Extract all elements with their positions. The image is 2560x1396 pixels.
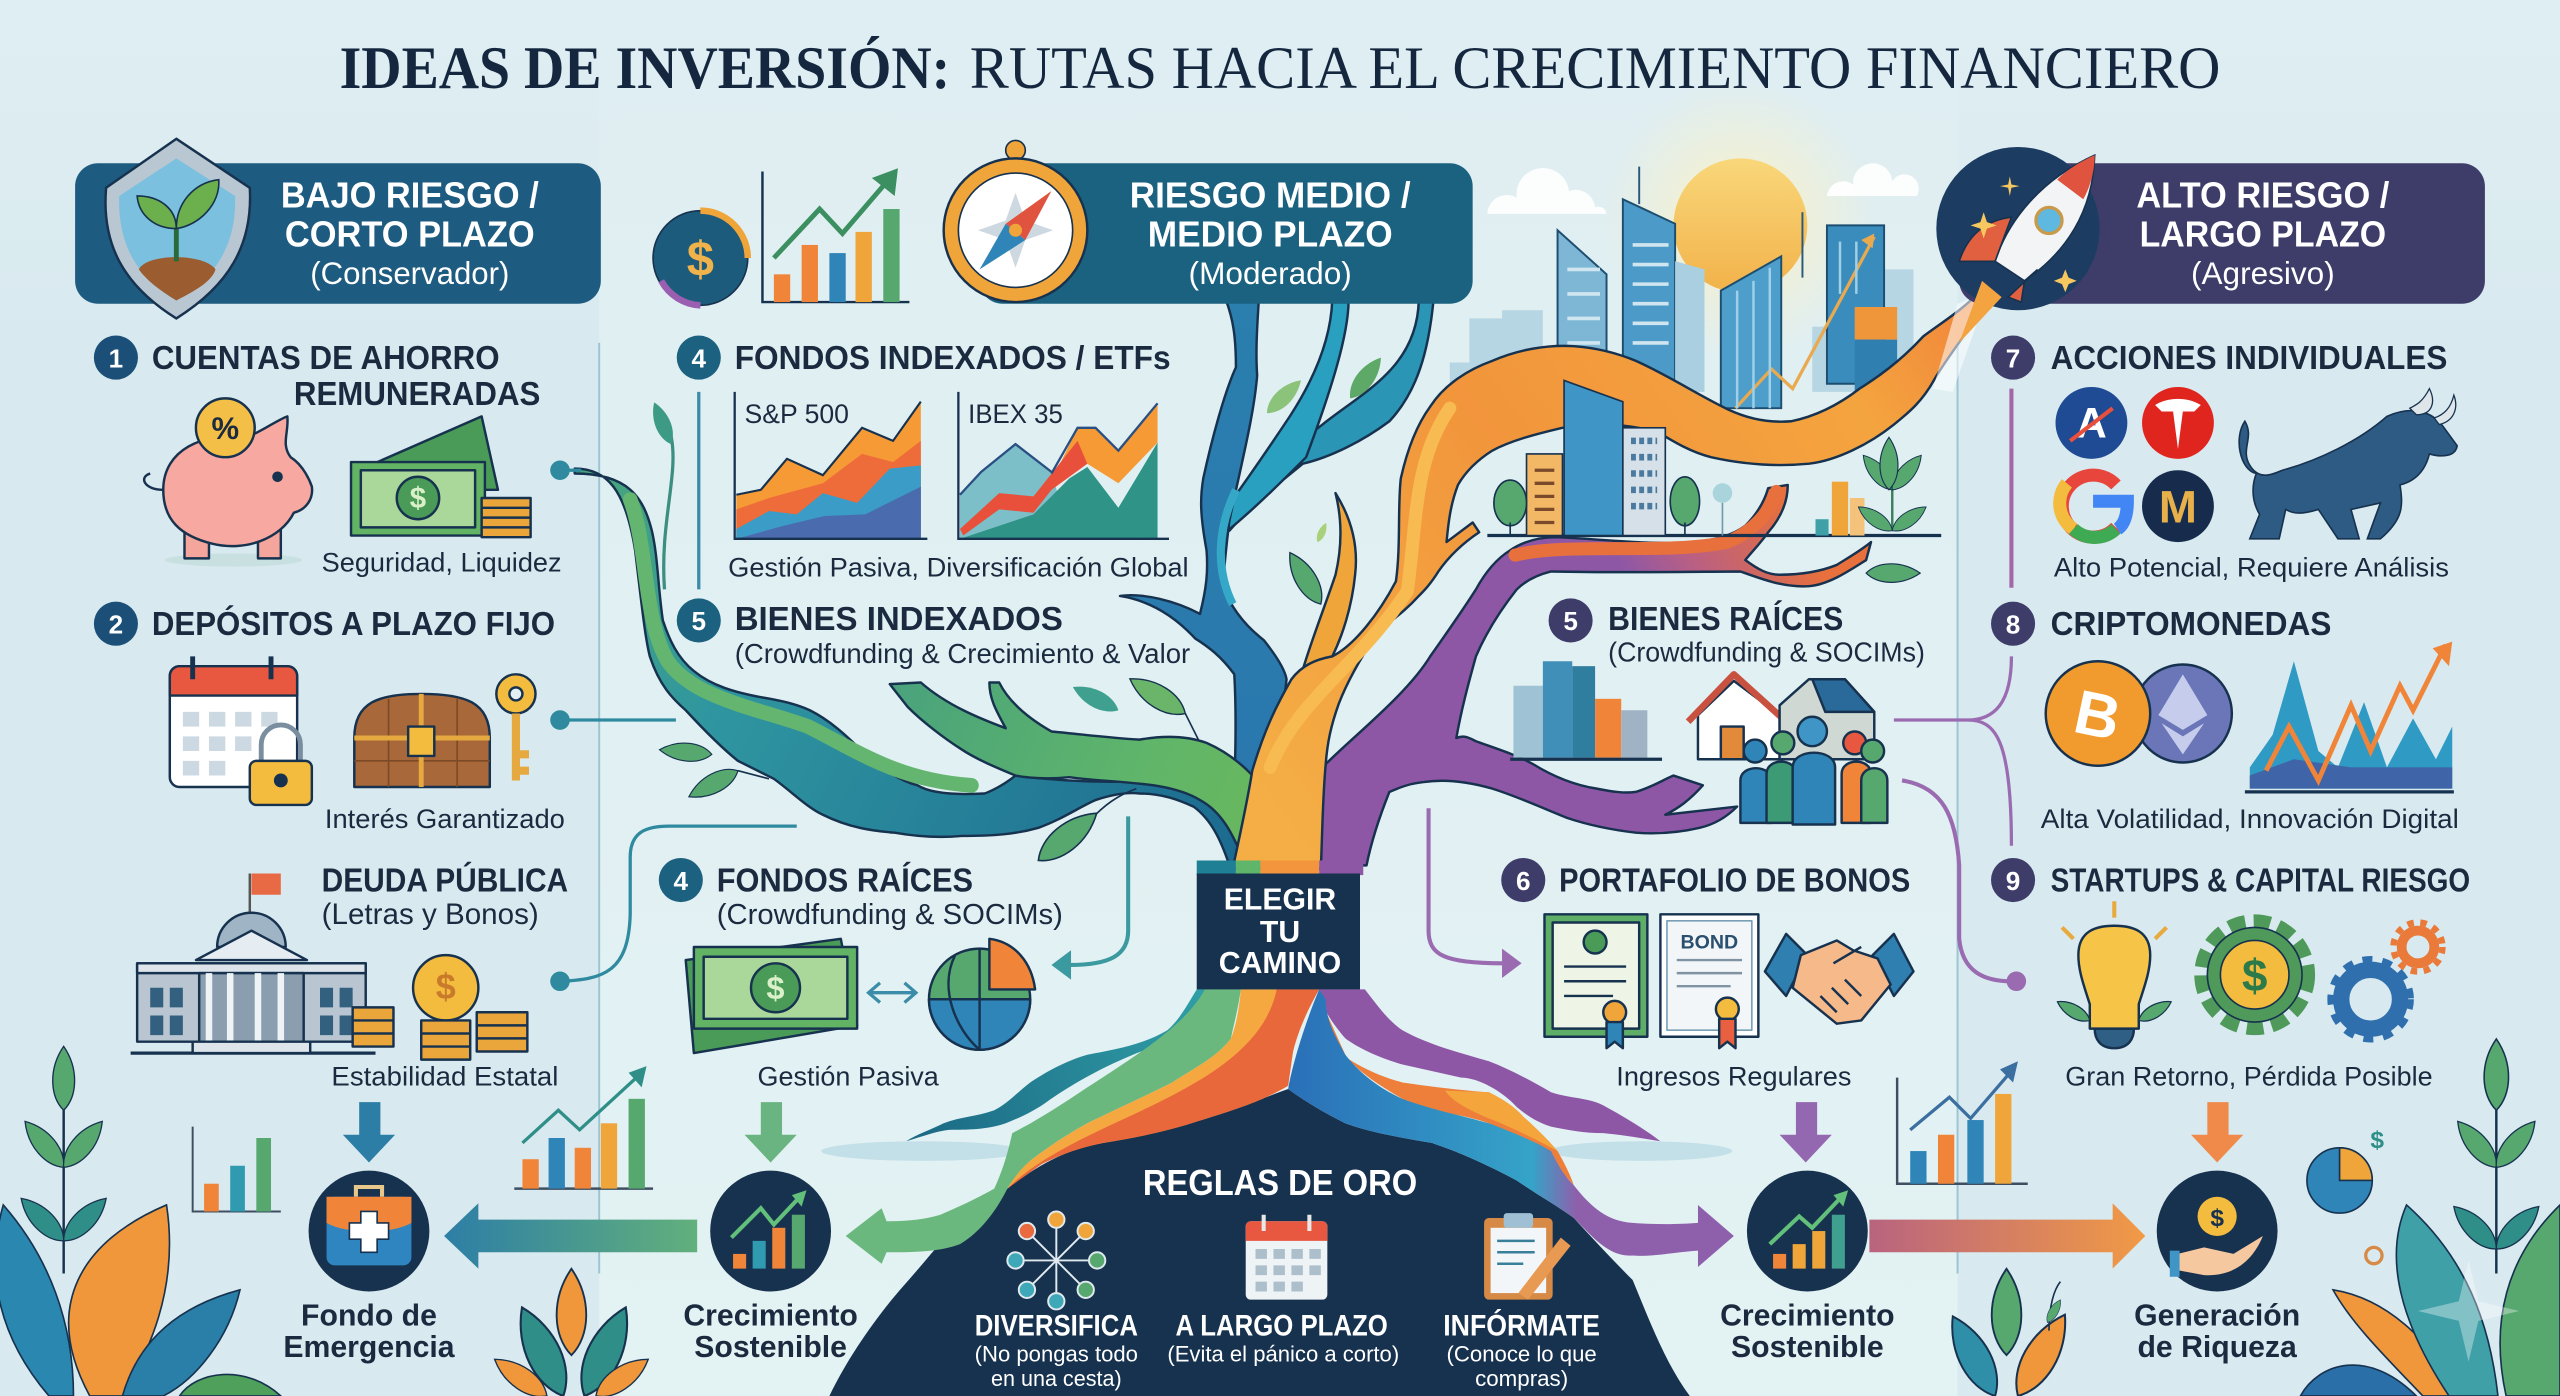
illustration: flame glow xyxy=(1933,291,1989,392)
icon: gears xyxy=(2331,922,2442,1038)
icon: coins xyxy=(353,955,527,1060)
section: startups: Gran Retorno, Pérdida Posible xyxy=(2065,1062,2433,1092)
icon: stock logos xyxy=(2056,387,2214,542)
section: depositos: Interés Garantizado xyxy=(325,804,565,834)
panel: elegir tu camino: ELEGIR xyxy=(1224,883,1336,916)
icon: hand holding coin: $ xyxy=(2210,1205,2224,1232)
node: crecimiento left: Crecimiento xyxy=(683,1300,858,1333)
branch: blue highlight xyxy=(1221,490,1236,604)
header: riesgo medio: RIESGO MEDIO / xyxy=(1130,174,1411,215)
root: blue right with purple arrow xyxy=(1288,989,1734,1267)
chart: small bars with trend xyxy=(514,1066,653,1189)
panel: reglas de oro: A LARGO PLAZO xyxy=(1176,1310,1388,1343)
icon: buildings xyxy=(1510,661,1662,759)
illustration: bottom-right plants xyxy=(1939,1039,2560,1396)
branch: orange to rocket xyxy=(1233,281,2000,869)
header: bajo riesgo xyxy=(75,139,601,318)
root: orange right xyxy=(1322,1004,1574,1185)
icon: globe with pie slice xyxy=(929,939,1035,1050)
section: acciones individuales xyxy=(1991,336,2457,582)
icon: cash stack xyxy=(686,939,857,1053)
node: generacion de riqueza: Generación xyxy=(2134,1300,2300,1333)
icon: bitcoin coin: B xyxy=(2068,677,2127,754)
section: bienes indexados: BIENES INDEXADOS xyxy=(735,601,1063,638)
section: bienes raices: (Crowdfunding & SOCIMs) xyxy=(1608,636,1925,667)
icon: shield with sprout xyxy=(105,139,250,318)
arrow: to wealth generation xyxy=(1869,1203,2145,1269)
section: portafolio de bonos xyxy=(1501,858,1913,1092)
icon: piggy bank xyxy=(144,398,312,567)
section: bienes indexados: 5 xyxy=(692,606,706,636)
icon: hanging leaf xyxy=(647,399,678,447)
header: bajo riesgo: (Conservador) xyxy=(310,256,509,291)
illustration: leaves along branches xyxy=(659,352,1920,870)
node: crecimiento right: Crecimiento xyxy=(1720,1300,1895,1333)
section: acciones individuales: Alto Potencial, Requiere Análisis xyxy=(2054,552,2449,582)
header: alto riesgo xyxy=(1936,147,2485,343)
icon: bull xyxy=(2239,389,2457,539)
section: acciones individuales: 7 xyxy=(2006,343,2020,373)
root: amber right xyxy=(1445,1091,1558,1151)
section: fondos raices: 4 xyxy=(674,866,689,896)
icon: government building xyxy=(131,874,376,1053)
icon: bond document: BOND xyxy=(1681,932,1738,954)
chart: small bars left xyxy=(193,1127,281,1211)
branch: green highlight on main xyxy=(630,500,971,785)
panel: reglas de oro: (Evita el pánico a corto) xyxy=(1167,1342,1399,1367)
icon: handshake xyxy=(1765,934,1913,1024)
icon: double arrow xyxy=(869,983,916,1002)
node: crecimiento left xyxy=(683,1171,858,1364)
section: criptomonedas: Alta Volatilidad, Innovación Digital xyxy=(2041,804,2459,834)
illustration: lower city on branch xyxy=(1487,380,1941,536)
section: portafolio de bonos: 6 xyxy=(1516,866,1531,896)
section: deuda publica xyxy=(131,861,568,1092)
branch: orange side twig xyxy=(1303,493,1356,669)
node: generacion de riqueza xyxy=(2134,1171,2300,1364)
section: bienes indexados: (Crowdfunding & Crecimiento & Valor xyxy=(735,638,1190,669)
section: depositos: 2 xyxy=(109,610,123,640)
branch: purple with forks xyxy=(1314,485,1871,865)
section: fondos indexados etfs xyxy=(677,336,1189,582)
node: fondo de emergencia xyxy=(283,1171,455,1364)
icon: growth chart xyxy=(762,168,909,302)
section: cuentas de ahorro: CUENTAS DE AHORRO xyxy=(152,340,500,377)
panel: reglas de oro: INFÓRMATE xyxy=(1443,1309,1600,1343)
icon: compass xyxy=(944,140,1087,302)
root: green left with arrow xyxy=(846,989,1241,1264)
chart: s&p 500 xyxy=(735,392,927,539)
icon: hand holding coin xyxy=(2170,1197,2263,1277)
icon: network xyxy=(1007,1211,1105,1309)
panel: elegir tu camino: TU xyxy=(1260,916,1300,949)
panel: elegir tu camino xyxy=(1197,860,1363,989)
node: fondo de emergencia: Emergencia xyxy=(283,1331,455,1364)
root: teal left xyxy=(906,989,1241,1141)
header: riesgo medio xyxy=(653,140,1473,305)
icon: dollar gear: $ xyxy=(2242,950,2267,1001)
section: cuentas de ahorro: Seguridad, Liquidez xyxy=(322,547,562,577)
icon: dollar gear xyxy=(2202,922,2307,1027)
title: RUTAS HACIA EL CRECIMIENTO FINANCIERO xyxy=(970,35,2220,102)
icon: rocket xyxy=(1936,147,2100,343)
icon: group of people xyxy=(1740,717,1887,825)
icon: first-aid kit xyxy=(327,1187,411,1265)
header: bajo riesgo: BAJO RIESGO / xyxy=(281,174,539,215)
section: fondos raices xyxy=(659,858,1063,1092)
connectors xyxy=(550,389,2026,991)
icon: bond document xyxy=(1660,914,1758,1048)
illustration: upper city with sun xyxy=(1450,82,1919,408)
panel: reglas de oro xyxy=(975,1162,1600,1391)
node: crecimiento right xyxy=(1720,1171,1895,1364)
arrow: down green xyxy=(744,1102,797,1162)
section: startups: STARTUPS & CAPITAL RIESGO xyxy=(2051,862,2470,899)
illustration: bottom-left plants xyxy=(0,1046,654,1396)
node: crecimiento right: Sostenible xyxy=(1731,1331,1884,1364)
section: bienes indexados xyxy=(677,598,1190,669)
section: startups: 9 xyxy=(2006,866,2020,896)
branch: teal left main xyxy=(575,469,1298,865)
icon: light bulb xyxy=(2054,901,2175,1048)
section: deuda publica: Estabilidad Estatal xyxy=(331,1062,558,1092)
branch: center stem xyxy=(1228,300,1349,531)
root: red-orange left xyxy=(1007,989,1319,1189)
branch: green upper xyxy=(890,682,1298,865)
panel: reglas de oro: DIVERSIFICA xyxy=(975,1310,1138,1343)
icon: calendar with lock xyxy=(170,656,312,805)
section: portafolio de bonos: Ingresos Regulares xyxy=(1616,1062,1851,1092)
section: cuentas de ahorro: 1 xyxy=(109,343,123,373)
chart: ibex 35: IBEX 35 xyxy=(968,399,1063,429)
tree: branches and trunk xyxy=(575,281,2000,869)
panel: reglas de oro: REGLAS DE ORO xyxy=(1143,1162,1417,1203)
header: bajo riesgo: CORTO PLAZO xyxy=(285,214,535,255)
section: deuda publica: (Letras y Bonos) xyxy=(322,898,539,931)
section: cuentas de ahorro: REMUNERADAS xyxy=(294,376,540,413)
header: riesgo medio: MEDIO PLAZO xyxy=(1148,214,1393,255)
section: fondos raices: FONDOS RAÍCES xyxy=(717,861,973,899)
chart: crypto volatility xyxy=(2245,642,2454,792)
icon: stock logos: A xyxy=(2076,400,2107,447)
icon: piggy bank: % xyxy=(212,411,239,446)
branch: right teal stem xyxy=(1228,300,1433,531)
section: deuda publica: DEUDA PÚBLICA xyxy=(322,861,568,899)
arrow: down purple xyxy=(1780,1102,1832,1162)
chart: small bars right xyxy=(1897,1061,2028,1184)
root: purple right xyxy=(1319,989,1660,1141)
node: fondo de emergencia: Fondo de xyxy=(301,1300,437,1333)
section: startups xyxy=(1991,858,2470,1092)
icon: treasure chest and key xyxy=(354,674,536,787)
section: fondos indexados etfs: 4 xyxy=(692,343,707,373)
icon: clipboard xyxy=(1484,1213,1571,1300)
icon: stock logos: M xyxy=(2159,481,2197,532)
panel: reglas de oro: compras) xyxy=(1475,1366,1568,1391)
title xyxy=(340,35,2220,102)
icon: dollar coin xyxy=(653,211,748,305)
icon: coins: $ xyxy=(436,966,456,1007)
panel: reglas de oro: (Conoce lo que xyxy=(1447,1342,1597,1367)
section: criptomonedas: CRIPTOMONEDAS xyxy=(2051,606,2331,643)
icon: calendar xyxy=(1246,1215,1327,1300)
section: depositos: DEPÓSITOS A PLAZO FIJO xyxy=(152,605,555,643)
header: alto riesgo: LARGO PLAZO xyxy=(2140,214,2386,255)
icon: houses xyxy=(1688,674,1874,759)
icon: dollar coin: $ xyxy=(687,233,714,287)
panel: reglas de oro: en una cesta) xyxy=(991,1366,1122,1391)
icon: certificate xyxy=(1544,914,1647,1048)
section: bienes raices: BIENES RAÍCES xyxy=(1608,600,1843,638)
icon: growth chart xyxy=(731,1190,807,1269)
section: fondos indexados etfs: FONDOS INDEXADOS / ETFs xyxy=(735,340,1171,377)
header: riesgo medio: (Moderado) xyxy=(1189,256,1352,291)
node: crecimiento left: Sostenible xyxy=(694,1331,847,1364)
header: alto riesgo: ALTO RIESGO / xyxy=(2136,174,2389,215)
icon: banknotes and coins xyxy=(351,416,531,537)
icon: ethereum coin xyxy=(2134,665,2232,762)
section: criptomonedas: 8 xyxy=(2006,610,2020,640)
icon: growth chart xyxy=(1770,1190,1848,1269)
chart: s&p 500: S&P 500 xyxy=(744,399,849,429)
section: fondos raices: (Crowdfunding & SOCIMs) xyxy=(717,899,1063,931)
icon: small pie with dollar: $ xyxy=(2370,1127,2384,1154)
node: generacion de riqueza: de Riqueza xyxy=(2137,1331,2297,1364)
section: portafolio de bonos: PORTAFOLIO DE BONOS xyxy=(1559,862,1910,899)
icon: banknotes and coins: $ xyxy=(410,482,426,515)
section: depositos xyxy=(94,602,565,834)
section: cuentas de ahorro xyxy=(94,336,562,577)
panel: elegir tu camino: CAMINO xyxy=(1219,947,1341,980)
section: bienes raices: 5 xyxy=(1563,606,1578,636)
root: orange left xyxy=(1007,989,1319,1189)
section: fondos raices: Gestión Pasiva xyxy=(758,1062,939,1092)
section: criptomonedas xyxy=(1991,602,2459,834)
illustration: hill with golden rules xyxy=(821,989,1734,1396)
icon: bitcoin coin xyxy=(2046,661,2150,766)
arrow: down orange xyxy=(2191,1102,2243,1162)
section: bienes raices xyxy=(1510,598,1925,825)
header: alto riesgo: (Agresivo) xyxy=(2191,256,2335,291)
section: acciones individuales: ACCIONES INDIVIDUALES xyxy=(2051,340,2447,377)
icon: cash stack: $ xyxy=(766,969,785,1006)
branch: blue left stem xyxy=(1120,300,1287,787)
arrow: to emergency fund xyxy=(444,1203,697,1269)
branch: orange highlight xyxy=(1270,408,1450,767)
title: IDEAS DE INVERSIÓN: xyxy=(340,35,950,102)
section: fondos indexados etfs: Gestión Pasiva, Diversificación Global xyxy=(728,552,1189,582)
branch: purple orange highlight xyxy=(1515,491,1776,555)
panel: reglas de oro: (No pongas todo xyxy=(975,1342,1138,1367)
arrow: down blue xyxy=(343,1102,395,1162)
chart: ibex 35 xyxy=(958,392,1169,539)
icon: small pie with dollar xyxy=(2307,1127,2384,1264)
